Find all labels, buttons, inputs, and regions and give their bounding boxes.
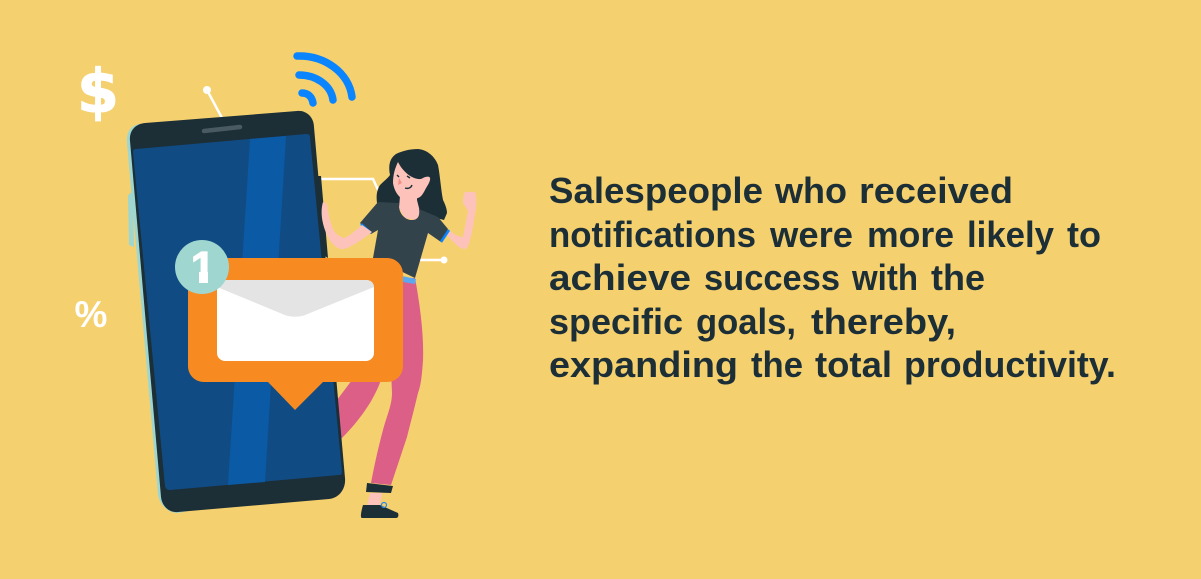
body text: were	[769, 214, 853, 255]
left sleeve trim	[361, 224, 371, 233]
icon: dollar sign: $	[77, 57, 119, 127]
front leg	[371, 278, 423, 485]
notification badge	[175, 240, 229, 294]
face	[393, 162, 430, 200]
woman figure	[337, 149, 476, 518]
body text: with	[851, 257, 918, 298]
envelope flap	[217, 280, 374, 317]
notification badge: 1	[190, 242, 216, 293]
phone speaker	[204, 127, 240, 131]
phone screen	[133, 134, 342, 490]
ankle cuff	[366, 483, 393, 493]
back leg	[337, 380, 381, 440]
phone body	[130, 111, 345, 512]
body text: likely	[967, 214, 1054, 255]
right sleeve trim	[441, 230, 449, 242]
icon: wifi signal	[297, 56, 352, 103]
body text: notifications	[549, 214, 756, 255]
body text: the	[931, 257, 985, 298]
ankle	[367, 493, 382, 505]
neck	[399, 196, 420, 220]
antenna connector	[203, 86, 222, 118]
body text	[549, 170, 1116, 385]
body text: the	[751, 344, 803, 385]
right arm	[445, 192, 476, 249]
body text: total	[815, 344, 892, 385]
belt	[402, 276, 416, 284]
body text: goals,	[696, 301, 796, 342]
body text: productivity.	[904, 344, 1116, 385]
connector line: lower right	[420, 256, 448, 264]
phone right button	[316, 176, 328, 258]
message bubble	[188, 258, 403, 410]
hair	[377, 149, 447, 220]
nose blush	[398, 178, 402, 185]
t-shirt	[360, 202, 448, 278]
smartphone	[127, 111, 345, 513]
icon: percent sign: %	[75, 294, 107, 335]
bubble body	[188, 258, 403, 410]
body text: who	[774, 170, 847, 211]
body text: achieve	[549, 257, 691, 298]
body text: more	[867, 214, 954, 255]
body text: to	[1067, 214, 1101, 255]
left arm and hand	[322, 202, 372, 249]
body text: thereby,	[811, 301, 956, 342]
phone side button	[128, 193, 134, 247]
shoelace	[382, 502, 386, 508]
body text: success	[704, 257, 840, 298]
body text: specific	[549, 301, 683, 342]
screen light band	[228, 136, 286, 485]
phone side edge	[127, 113, 345, 513]
body text: received	[859, 170, 1013, 211]
envelope body	[217, 280, 374, 361]
eyes and smile	[397, 175, 412, 188]
shoe	[361, 505, 398, 518]
connector line: upper right	[318, 179, 379, 192]
body text: Salespeople	[549, 170, 763, 211]
body text: expanding	[549, 344, 738, 385]
